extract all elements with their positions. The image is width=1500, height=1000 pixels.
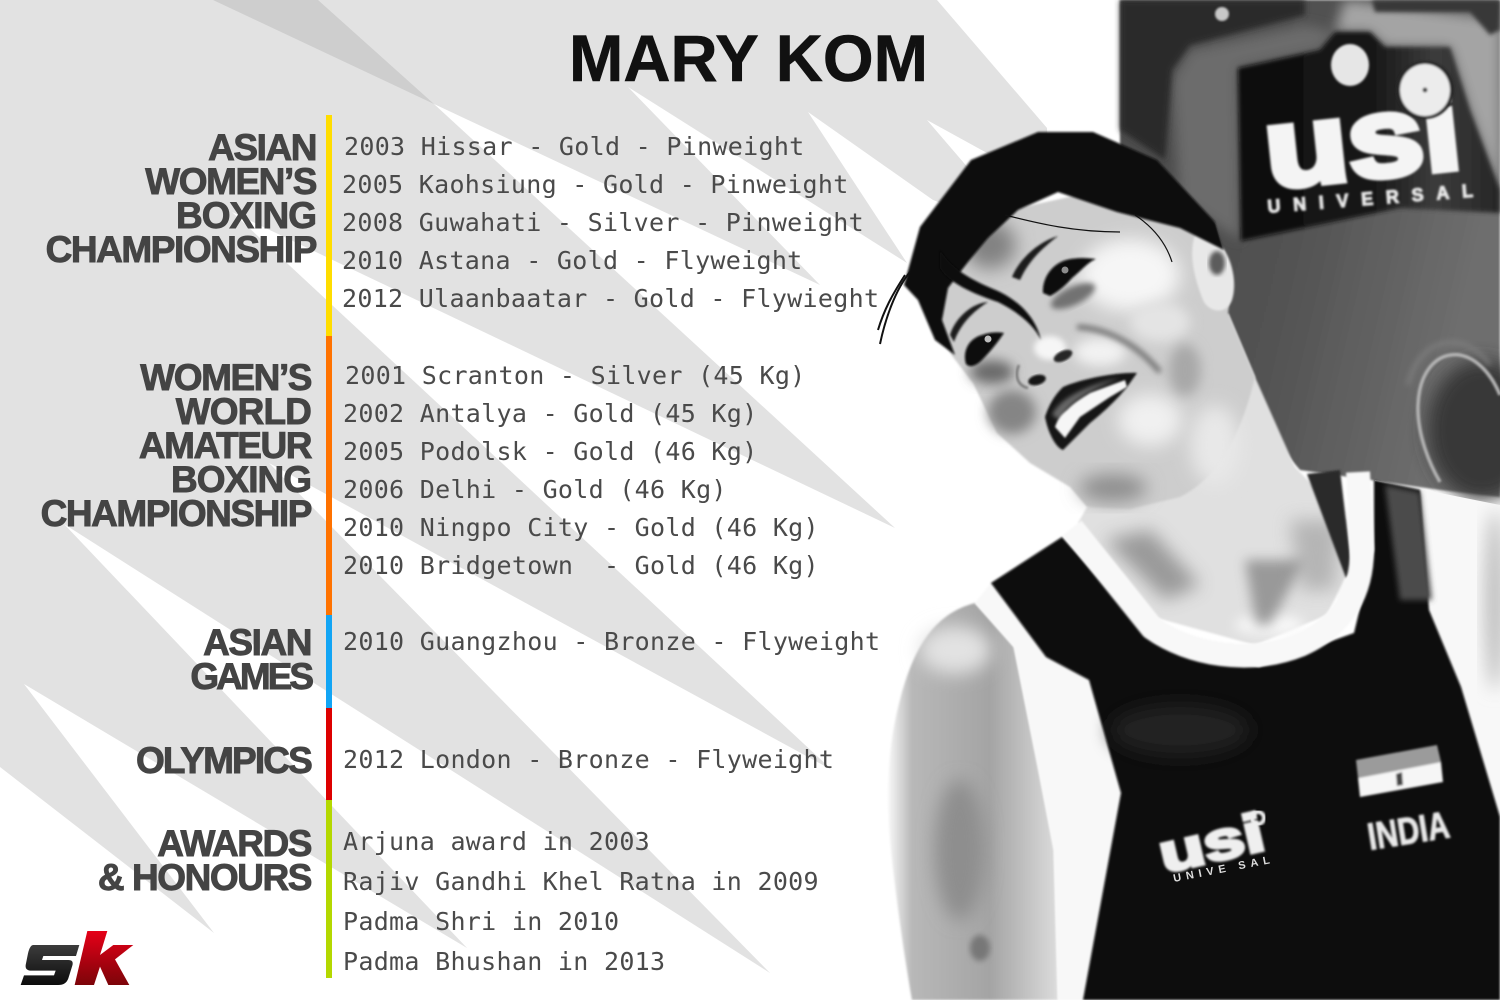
dark top edge right [1372,0,1500,35]
bag brand subtext: UNIVERSAL [1267,181,1474,217]
nose [1034,336,1066,360]
heading: ASIAN [208,127,316,168]
heading: WOMEN’S [140,357,312,398]
title: MARY KOM [569,21,928,95]
eyes [1043,258,1096,296]
face highlights [1080,239,1180,311]
bag upper panel, light right side [1335,0,1500,190]
face shadows [964,221,1016,269]
eyebrows [1012,236,1058,280]
awards list: Rajiv Gandhi Khel Ratna in 2009 [343,867,819,896]
heading: OLYMPICS [136,740,312,781]
result: 2012 London - Bronze - Flyweight [343,745,834,774]
smile line [1077,327,1160,372]
jersey dark neck strap [1307,470,1352,578]
heading: CHAMPIONSHIP [41,493,312,534]
section: Asian Games [190,622,880,697]
chest logo text: usi [1153,802,1270,885]
heading: WOMEN’S [145,161,317,202]
hair [904,132,1224,355]
results list: 2010 Bridgetown - Gold (46 Kg) [343,551,819,580]
heading: BOXING [171,459,311,500]
flag [1356,745,1443,797]
logo ring on bag [1396,61,1454,119]
heading: AMATEUR [139,425,312,466]
collar white band [1072,472,1362,656]
mouth [1045,373,1137,450]
results list: 2003 Hissar - Gold - Pinweight [344,132,805,161]
chest logo subtext: UNIVE SAL [1172,854,1271,885]
forelock strand [940,250,1041,340]
dark top band of bag [1120,0,1305,160]
awards list: Arjuna award in 2003 [343,827,650,856]
photo: boxer [878,132,1500,1000]
results list: 2010 Astana - Gold - Flyweight [342,246,803,275]
photo: punching bag background [1120,0,1500,500]
chest logo ring [1252,812,1264,824]
section: Asian Women's Boxing Championship [46,127,879,313]
results list: 2005 Kaohsiung - Gold - Pinweight [342,170,849,199]
section: Women's World Amateur Boxing Championship [41,357,819,580]
neck and chest skin [1078,313,1350,645]
ear [1192,235,1234,311]
results list: 2008 Guwahati - Silver - Pinweight [342,208,864,237]
India text: INDIA [1365,805,1452,859]
results list: 2006 Delhi - Gold (46 Kg) [343,475,727,504]
hair strands [878,215,1172,344]
bag label panel [1238,32,1500,241]
heading: GAMES [190,656,313,697]
teeth [1055,380,1127,438]
results list: 2012 Ulaanbaatar - Gold - Flywieght [342,284,879,313]
results list: 2001 Scranton - Silver (45 Kg) [345,361,806,390]
heading: CHAMPIONSHIP [46,229,317,270]
heading: AWARDS [157,823,312,864]
jersey black body [991,480,1500,1000]
heading: ASIAN [203,622,311,663]
results list: 2005 Podolsk - Gold (46 Kg) [343,437,757,466]
logo circle on bag [1331,44,1369,86]
right shoulder white [1375,480,1500,1000]
section: Olympics [136,740,834,781]
coloured timeline bar [326,115,332,978]
jersey white armhole band [975,583,1121,1000]
heading: BOXING [176,195,316,236]
results list: 2002 Antalya - Gold (45 Kg) [343,399,757,428]
logo: sk [21,931,133,985]
results list: 2010 Ningpo City - Gold (46 Kg) [343,513,819,542]
awards list: Padma Shri in 2010 [343,907,619,936]
bag ring mark [1427,360,1500,500]
bag grommet [1215,7,1229,21]
bag brand text: usi [1258,67,1466,212]
section: Awards and Honours [98,823,819,976]
face [930,190,1255,509]
heading: WORLD [176,391,311,432]
arm [888,603,1058,1000]
heading: & HONOURS [98,857,312,898]
awards list: Padma Bhushan in 2013 [343,947,665,976]
result: 2010 Guangzhou - Bronze - Flyweight [343,627,880,656]
